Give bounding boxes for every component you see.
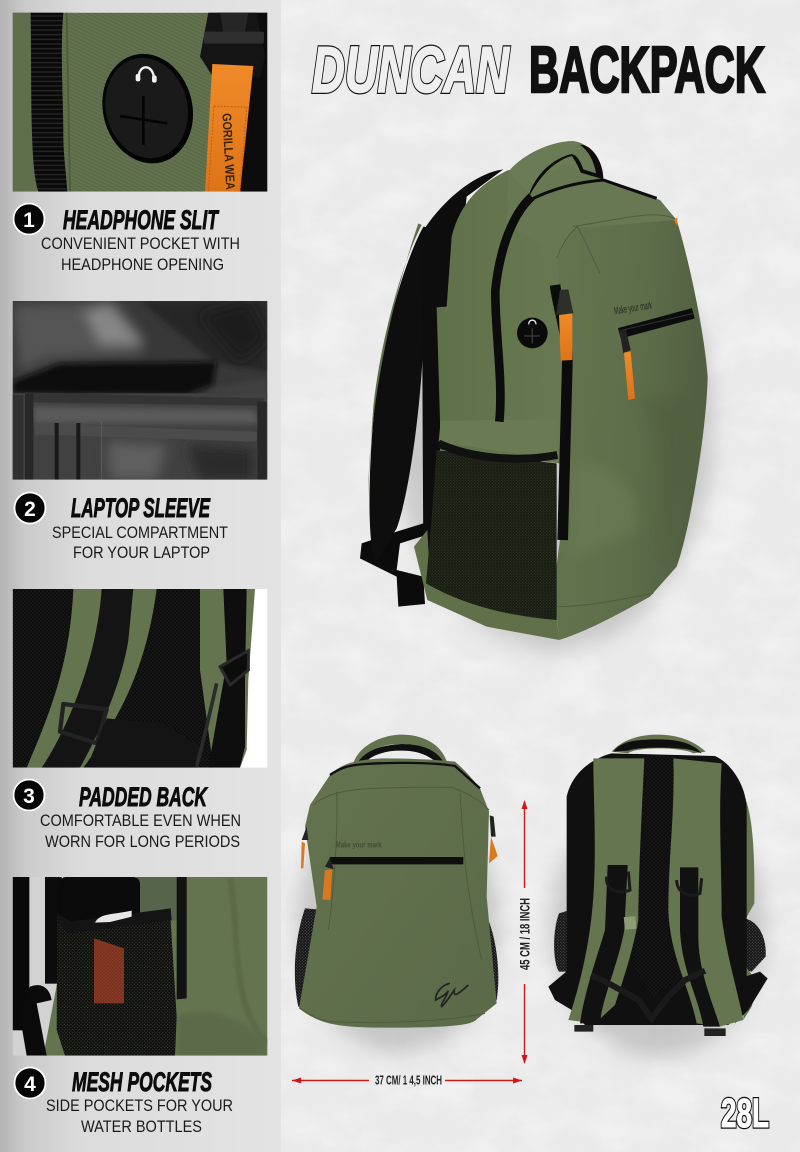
body [299, 758, 497, 1028]
shadow [552, 797, 765, 1057]
pocket zip [330, 850, 463, 872]
front view backpack [295, 735, 498, 1053]
wing straps [548, 970, 768, 1023]
top zip [530, 180, 657, 200]
brand print: Make your mark [336, 840, 382, 849]
image: padded back straps [13, 589, 267, 768]
description: WATER BOTTLES [81, 1118, 202, 1136]
description: SPECIAL COMPARTMENT [52, 524, 228, 542]
image: headphone slit close-up: GORILLA WEA [219, 113, 237, 190]
number badge 2: 2 [24, 498, 36, 521]
lower strap loop [360, 523, 427, 607]
width dimension arrow [292, 1074, 522, 1088]
image: headphone slit close-up [13, 13, 267, 192]
panel: feature column [0, 0, 281, 1152]
left padded strap [568, 758, 644, 1023]
side zip [495, 197, 532, 422]
top handle [508, 141, 603, 195]
number badge 3: 3 [23, 785, 35, 808]
width dimension arrow: 37 CM/ 1 4,5 INCH [375, 1074, 442, 1088]
feature 1: headphone slit [13, 13, 267, 274]
image: laptop sleeve interior [13, 301, 267, 480]
number badge 1: 1 [23, 209, 35, 232]
description: WORN FOR LONG PERIODS [45, 833, 240, 851]
number badge 4: 4 [24, 1073, 36, 1096]
logo patch [624, 916, 636, 930]
side panel [437, 170, 597, 463]
height dimension arrow [516, 800, 532, 1064]
description: FOR YOUR LAPTOP [73, 544, 210, 562]
buckle and chest strap [591, 971, 705, 1018]
height dimension arrow: 45 CM / 18 INCH [516, 898, 532, 970]
main backpack three-quarter view [360, 141, 713, 650]
elastic band [438, 443, 557, 459]
number badge 4 [14, 1068, 46, 1098]
handle [612, 735, 706, 753]
description [41, 235, 240, 274]
description [46, 1097, 233, 1136]
zip pull [322, 869, 332, 900]
bottom corner panel [414, 530, 559, 640]
logo [436, 983, 468, 1007]
feature 3: padded back [13, 589, 267, 851]
title: DUNCAN [312, 33, 510, 106]
olive right side [742, 790, 754, 920]
description: SIDE POCKETS FOR YOUR [46, 1097, 233, 1115]
shoulder strap [369, 227, 440, 563]
capacity label: 28L [721, 1090, 769, 1136]
orange pull [559, 313, 572, 361]
capacity label [721, 1090, 769, 1136]
heading: LAPTOP SLEEVE [71, 493, 211, 523]
back mesh body [567, 753, 747, 1025]
right padded strap [668, 758, 743, 1027]
feature 4: mesh pockets [13, 877, 267, 1136]
title: DUNCAN [312, 33, 510, 106]
image: mesh pocket with bottle [13, 877, 267, 1056]
description [52, 524, 228, 562]
seams [300, 787, 489, 1022]
drop shadow [393, 197, 713, 650]
description: CONVENIENT POCKET WITH [41, 235, 240, 253]
title [312, 33, 765, 106]
pocket top panel [439, 419, 557, 460]
description: HEADPHONE OPENING [61, 256, 224, 274]
front panel [553, 180, 708, 640]
number badge 2 [14, 492, 46, 524]
handle [353, 735, 447, 765]
right webbing [680, 867, 720, 1027]
front pocket zip [619, 313, 693, 333]
heading: PADDED BACK [79, 782, 209, 812]
shadow [298, 793, 498, 1053]
back panel edge [422, 169, 503, 560]
description: COMFORTABLE EVEN WHEN [40, 812, 241, 830]
description [40, 812, 241, 851]
headphone port [517, 318, 548, 348]
front zip side [555, 285, 567, 540]
heading: HEADPHONE SLIT [63, 205, 220, 235]
left webbing [580, 865, 628, 1023]
number badge 1 [14, 204, 44, 234]
orange tab right [674, 217, 677, 227]
back view backpack [548, 735, 768, 1057]
heading: MESH POCKETS [72, 1067, 212, 1097]
feature 2: laptop sleeve [13, 301, 267, 562]
mesh pocket [426, 450, 557, 620]
centre mesh [632, 757, 685, 997]
seams [557, 215, 677, 607]
capacity label: 28L [721, 1090, 769, 1136]
d-rings [607, 872, 702, 895]
top flap [507, 153, 677, 258]
side mesh [295, 907, 498, 1010]
top zip [330, 763, 480, 788]
brand print: Make your mark [613, 299, 653, 317]
side pockets [554, 910, 766, 972]
number badge 3 [14, 780, 44, 810]
